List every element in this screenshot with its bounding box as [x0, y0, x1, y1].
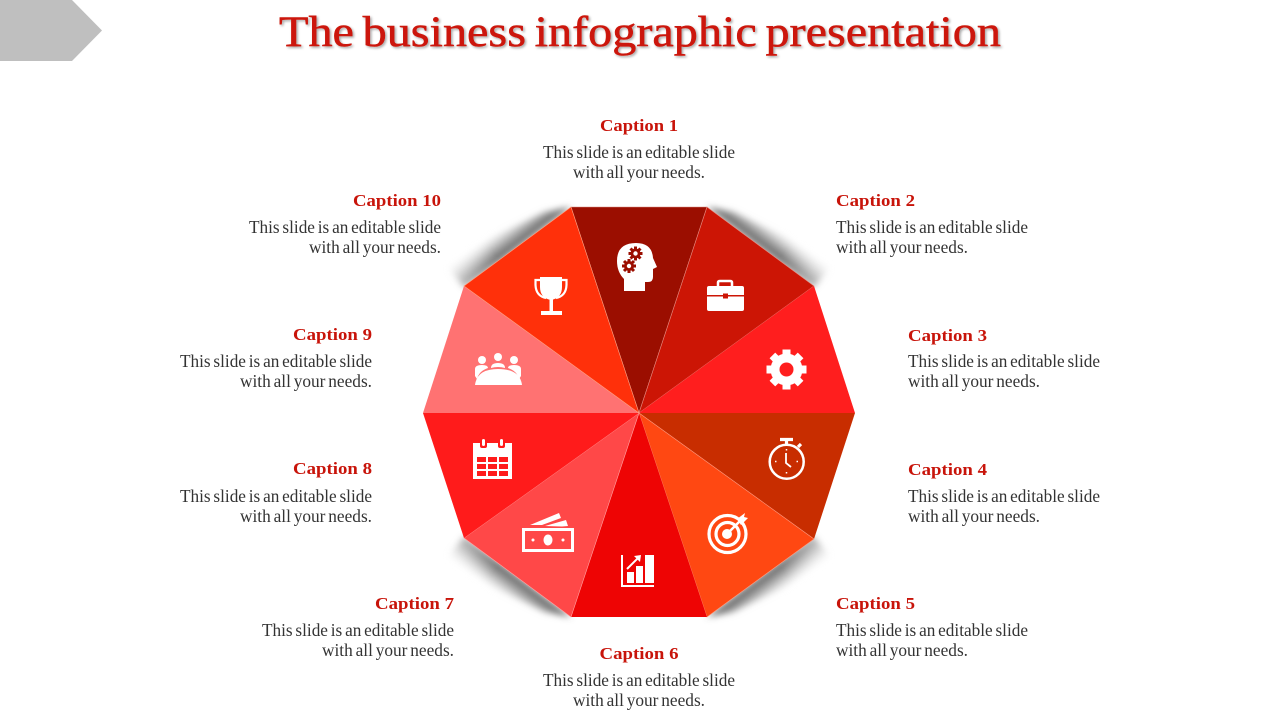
caption 3: This slide is an editable slide — [908, 351, 1100, 371]
icon: calendar — [473, 439, 512, 479]
caption 1: This slide is an editable slide — [543, 142, 735, 162]
caption 8: This slide is an editable slide — [180, 486, 372, 506]
segment 3 — [639, 286, 855, 413]
segment 8 — [423, 413, 639, 538]
segment 6 — [571, 413, 707, 617]
segment 10 — [464, 207, 639, 413]
caption 7 — [262, 594, 455, 660]
icon: target — [709, 513, 748, 552]
segment 1 — [571, 207, 707, 413]
decagon wheel — [423, 207, 855, 617]
caption 3: with all your needs. — [908, 371, 1040, 391]
title: The business infographic presentation — [279, 9, 1001, 56]
caption 5: Caption 5 — [836, 594, 915, 613]
caption 1 — [543, 116, 735, 182]
caption 7: with all your needs. — [322, 640, 454, 660]
icon: trophy — [536, 277, 566, 315]
icon: bar chart — [621, 555, 654, 587]
caption 7: Caption 7 — [375, 594, 455, 613]
shadows behind the wheel — [448, 207, 830, 617]
caption 4 — [908, 460, 1100, 526]
icon: stopwatch — [770, 440, 804, 479]
caption 6: Caption 6 — [600, 644, 678, 663]
segment 4 — [639, 413, 855, 539]
caption 8: with all your needs. — [240, 506, 372, 526]
caption 6 — [543, 644, 735, 710]
segment 5 — [639, 413, 814, 617]
caption 7: This slide is an editable slide — [262, 620, 454, 640]
caption 8 — [180, 459, 372, 526]
caption 6: This slide is an editable slide — [543, 670, 735, 690]
caption 2 — [836, 191, 1028, 257]
caption 2: with all your needs. — [836, 237, 968, 257]
caption 9 — [180, 325, 372, 391]
arrow tab — [0, 0, 102, 61]
caption 9: This slide is an editable slide — [180, 351, 372, 371]
icon: gear — [766, 350, 806, 390]
segment 7 — [464, 413, 639, 617]
caption 1: Caption 1 — [600, 116, 678, 135]
caption 6: with all your needs. — [573, 690, 705, 710]
caption 4: with all your needs. — [908, 506, 1040, 526]
caption 4: This slide is an editable slide — [908, 486, 1100, 506]
caption 1: with all your needs. — [573, 162, 705, 182]
icon: banknotes — [524, 513, 572, 550]
caption 5: with all your needs. — [836, 640, 968, 660]
icon: briefcase — [707, 281, 744, 311]
caption 10: This slide is an editable slide — [249, 217, 441, 237]
icon: head with gears — [617, 243, 657, 291]
caption 2: This slide is an editable slide — [836, 217, 1028, 237]
segment 9 — [423, 286, 639, 413]
caption 10: Caption 10 — [353, 191, 441, 210]
caption 10: with all your needs. — [309, 237, 441, 257]
caption 3: Caption 3 — [908, 326, 987, 345]
caption 3 — [908, 326, 1100, 391]
caption 10 — [249, 191, 441, 257]
caption 4: Caption 4 — [908, 460, 988, 479]
caption 2: Caption 2 — [836, 191, 915, 210]
icon: meeting people — [475, 353, 522, 385]
caption 5: This slide is an editable slide — [836, 620, 1028, 640]
caption 8: Caption 8 — [293, 459, 372, 478]
segment 2 — [639, 207, 814, 413]
caption 9: Caption 9 — [293, 325, 372, 344]
caption 5 — [836, 594, 1028, 660]
caption 9: with all your needs. — [240, 371, 372, 391]
